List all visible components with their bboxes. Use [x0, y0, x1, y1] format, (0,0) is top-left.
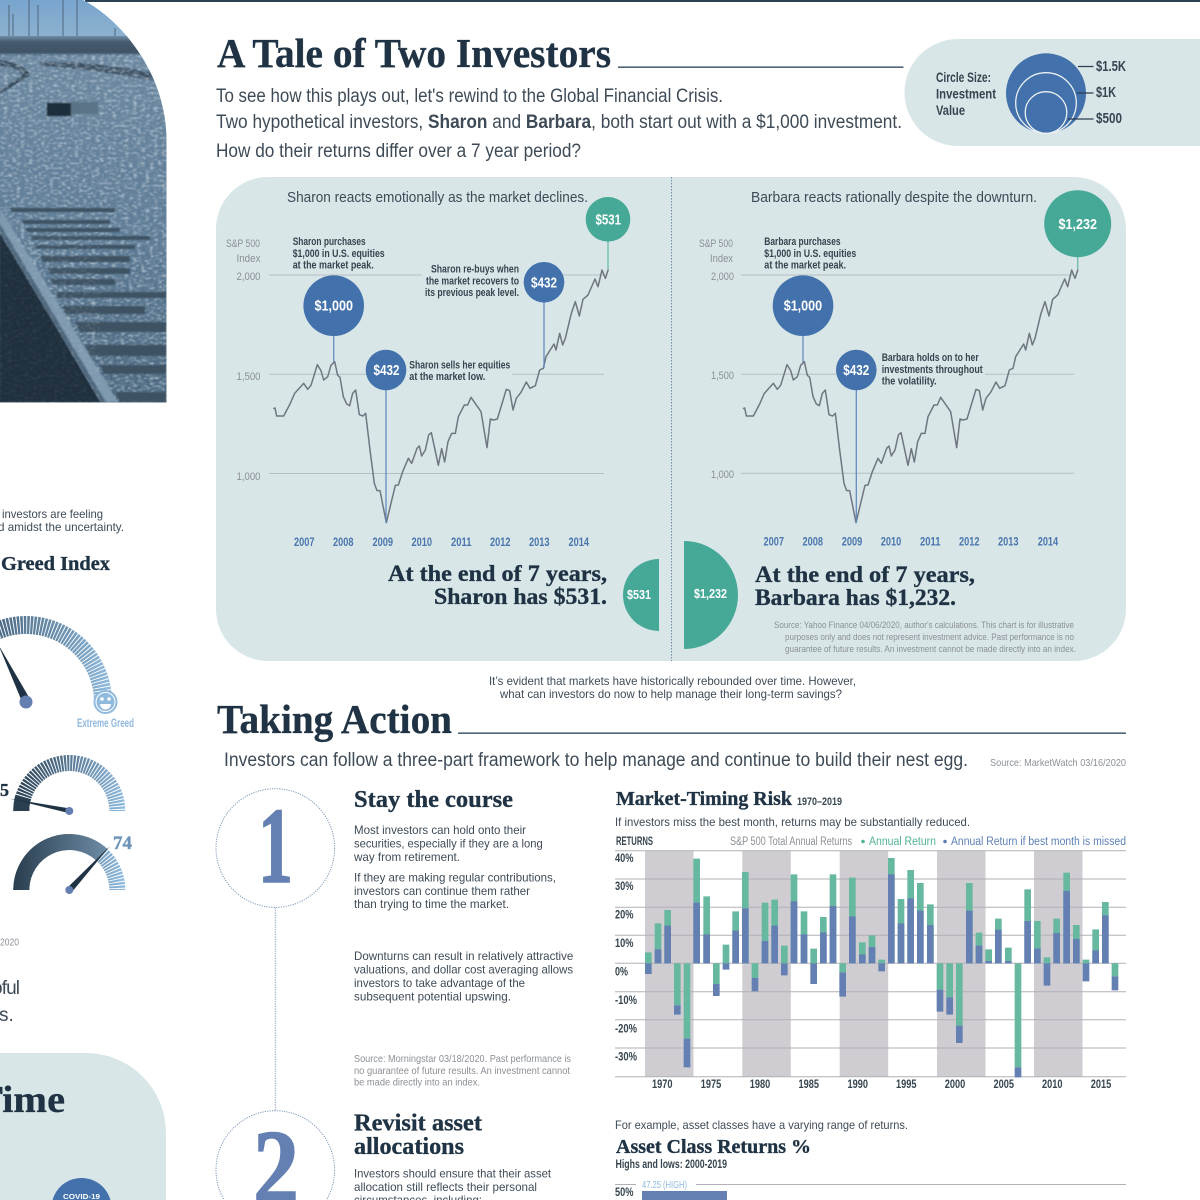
- chart: Barbara: 2014: [1038, 536, 1059, 548]
- chart: Barbara: 1,500: [711, 370, 734, 382]
- photo: railway tracks: [0, 0, 170, 404]
- source: MarketWatch: Source: MarketWatch 03/16/2020: [990, 757, 1126, 769]
- chart: asset class returns: For example, asset classes have a varying range of returns.: [615, 1118, 908, 1132]
- chart: Sharon: at the market low.: [409, 371, 485, 383]
- step 1: stay the course: 1: [258, 787, 293, 906]
- subheading: framework: Investors can follow a three-part framework to help manage and continue to build their nest egg.: [224, 750, 968, 771]
- source note: chart: purposes only and does not represent investment advice. Past performance is no: [785, 632, 1074, 643]
- bar chart: market timing returns: 2005: [994, 1077, 1014, 1091]
- transition text: [490, 676, 856, 700]
- intro text: [216, 86, 902, 162]
- chart: Sharon: Index: [236, 253, 261, 265]
- chart legend: returns: Annual Return: [869, 836, 936, 848]
- bar chart: market timing returns: 1970: [652, 1077, 673, 1091]
- bar chart: market timing returns: 1985: [798, 1077, 819, 1091]
- heading: market-timing risk: [615, 789, 970, 829]
- heading: market-timing risk: 1970–2019: [797, 796, 842, 808]
- chart: Sharon: Sharon purchases: [293, 236, 366, 248]
- source note: chart: guarantee of future results. An investment cannot be made directly into an index.: [785, 644, 1076, 655]
- bar chart: market timing returns: [615, 851, 1126, 1091]
- chart: Barbara: at the market peak.: [764, 260, 846, 272]
- chart: Sharon: 2009: [372, 537, 393, 549]
- chart: Barbara: $1,000 in U.S. equities: [764, 248, 856, 260]
- chart legend: returns: Annual Return if best month is missed: [951, 836, 1126, 848]
- left column text: investor sentiment: investors are feeling: [2, 507, 103, 521]
- chart: Sharon: 2007: [294, 537, 314, 549]
- chart: Barbara: 2008: [802, 536, 823, 548]
- result: Barbara: Barbara has $1,232.: [755, 585, 956, 610]
- step 1: stay the course: no guarantee of future results. An investment cannot: [354, 1065, 570, 1077]
- chart: Barbara: 1,000: [711, 469, 734, 481]
- chart: Sharon: 2014: [568, 537, 589, 549]
- chart: Sharon: $1,000: [314, 298, 353, 314]
- gauge: previous value 5: 5: [0, 780, 9, 800]
- chart: Sharon: its previous peak level.: [425, 287, 519, 299]
- bar chart: market timing returns: 40%: [615, 851, 634, 865]
- step 2: revisit asset allocations: allocations: [354, 1134, 464, 1160]
- step 1: stay the course: [216, 787, 574, 1111]
- heading: Taking Action: Taking Action: [217, 696, 452, 742]
- bar chart: market timing returns: 1990: [848, 1077, 868, 1091]
- legend: circle size: Investment: [936, 86, 996, 102]
- bar chart: market timing returns: 1980: [750, 1077, 771, 1091]
- step 1: stay the course: investors can continue them rather: [354, 884, 530, 898]
- chart: Barbara: 2009: [842, 536, 862, 548]
- chart: Barbara: 2010: [881, 536, 901, 548]
- chart: Sharon: 2,000: [236, 271, 260, 283]
- bar chart: market timing returns: 2010: [1042, 1077, 1063, 1091]
- chart: Barbara: Barbara holds on to her: [882, 352, 979, 364]
- chart: Sharon: S&P 500: [226, 238, 260, 250]
- step 1: stay the course: Downturns can result in relatively attractive: [354, 949, 574, 963]
- panel: time: [0, 1053, 166, 1200]
- step 1: stay the course: Stay the course: [354, 787, 513, 813]
- step 1: stay the course: securities, especially if they are a long: [354, 836, 543, 850]
- chart: Barbara: investments throughout: [882, 364, 983, 376]
- source note: chart: [774, 620, 1076, 655]
- step 1: stay the course: way from retirement.: [353, 850, 460, 864]
- result: Barbara: [684, 541, 975, 649]
- step 1: stay the course: than trying to time the market.: [354, 897, 509, 911]
- chart: asset class returns: 47.25 (HIGH): [642, 1179, 687, 1191]
- chart: Barbara: [699, 190, 1111, 548]
- legend: circle size: $1K: [1096, 85, 1116, 101]
- chart: Barbara: Index: [710, 253, 733, 265]
- transition text: what can investors do now to help manage their long-term savings?: [499, 687, 842, 701]
- legend: circle size: $500: [1096, 111, 1122, 127]
- left column text: investor sentiment: [0, 510, 123, 534]
- result: Sharon: [388, 559, 659, 631]
- heading: market-timing risk: If investors miss the best month, returns may be substantially reduced.: [615, 815, 970, 829]
- heading: market-timing risk: Market-Timing Risk: [616, 789, 792, 810]
- chart: Barbara: Barbara reacts rationally despite the downturn.: [751, 190, 1037, 206]
- chart: Sharon: 2010: [412, 537, 432, 549]
- chart: Sharon: the market recovers to: [426, 276, 519, 288]
- chart: Barbara: 2011: [920, 536, 941, 548]
- chart: Barbara: Barbara purchases: [764, 236, 841, 248]
- chart legend: returns: RETURNS: [616, 836, 653, 848]
- left column text: investor sentiment: d amidst the uncertainty.: [0, 520, 124, 534]
- step 2: revisit asset allocations: Revisit asset: [354, 1111, 482, 1137]
- gauge: fear and greed main: [0, 625, 134, 730]
- step 1: stay the course: be made directly into an index.: [354, 1076, 480, 1088]
- step 1: stay the course: If they are making regular contributions,: [354, 870, 556, 884]
- chart: Sharon: $432: [374, 363, 400, 379]
- chart: Sharon: $432: [531, 276, 557, 292]
- chart: asset class returns: Highs and lows: 2000-2019: [616, 1159, 727, 1171]
- bar chart: market timing returns: 2000: [945, 1077, 966, 1091]
- chart: Sharon: 1,000: [236, 471, 260, 483]
- legend: circle size: $1.5K: [1096, 59, 1126, 75]
- chart: Sharon: Sharon sells her equities: [409, 359, 510, 371]
- chart: Barbara: 2,000: [711, 271, 734, 283]
- step 2: revisit asset allocations: Investors should ensure that their asset: [354, 1166, 552, 1180]
- intro text: To see how this plays out, let's rewind to the Global Financial Crisis.: [216, 86, 723, 107]
- chart: Sharon: 2013: [529, 537, 550, 549]
- result: Barbara: At the end of 7 years,: [755, 562, 975, 587]
- bar chart: market timing returns: 10%: [615, 936, 634, 950]
- chart: Barbara: 2012: [959, 536, 980, 548]
- step 2: revisit asset allocations: allocation still reflects their personal: [354, 1180, 537, 1194]
- result: Sharon: At the end of 7 years,: [388, 561, 607, 586]
- bar chart: market timing returns: 30%: [615, 879, 634, 893]
- chart: asset class returns: [615, 1118, 1126, 1200]
- gauge: previous value 5: [0, 763, 117, 815]
- result: Sharon: Sharon has $531.: [434, 584, 607, 609]
- legend: circle size: Value: [936, 102, 965, 118]
- chart: Sharon: at the market peak.: [293, 260, 374, 272]
- chart: Barbara: $1,000: [784, 298, 822, 314]
- bar chart: market timing returns: 20%: [615, 908, 634, 922]
- gauge: fear and greed main: Extreme Greed: [77, 718, 134, 730]
- intro text: How do their returns differ over a 7 year period?: [216, 141, 581, 162]
- transition text: It’s evident that markets have historically rebounded over time. However,: [489, 674, 856, 688]
- bar chart: market timing returns: 0%: [615, 964, 628, 978]
- chart: Barbara: $432: [843, 363, 869, 379]
- step 1: stay the course: investors to take advantage of the: [354, 976, 525, 990]
- chart: Sharon: 2008: [333, 537, 354, 549]
- left column text fragments: [0, 980, 19, 1021]
- legend: circle size: [904, 39, 1200, 146]
- chart: Sharon: 2012: [490, 537, 510, 549]
- chart: Barbara: 2013: [998, 536, 1018, 548]
- chart legend: returns: [616, 836, 1126, 845]
- step 1: stay the course: subsequent potential upswing.: [354, 990, 511, 1004]
- chart: Barbara: the volatility.: [882, 376, 937, 388]
- chart: Sharon: $1,000 in U.S. equities: [293, 248, 385, 260]
- chart: Barbara: $1,232: [1058, 216, 1097, 233]
- chart legend: returns: S&P 500 Total Annual Returns: [730, 836, 852, 848]
- source note: chart: Source: Yahoo Finance 04/06/2020, author's calculations. This chart is for illustrative: [774, 620, 1074, 631]
- result: Sharon: $531: [627, 588, 651, 602]
- chart: asset class returns: 50%: [615, 1185, 634, 1199]
- chart: asset class returns: Asset Class Returns %: [616, 1137, 811, 1158]
- title: A Tale of Two Investors: [217, 30, 611, 76]
- panel: two investor comparison: [216, 177, 1126, 661]
- source: gauge: 2020: [0, 936, 19, 948]
- chart: Barbara: S&P 500: [699, 238, 733, 250]
- step 2: revisit asset allocations: [216, 1109, 552, 1200]
- bar chart: market timing returns: -10%: [615, 993, 637, 1007]
- chart: Barbara: 2007: [764, 536, 784, 548]
- bar chart: market timing returns: -30%: [615, 1050, 637, 1064]
- gauge: current value 74: 74: [113, 833, 132, 854]
- step 1: stay the course: valuations, and dollar cost averaging allows: [354, 962, 573, 976]
- bar chart: market timing returns: -20%: [615, 1022, 637, 1036]
- bar chart: market timing returns: 2015: [1091, 1077, 1112, 1091]
- chart: Sharon: [226, 190, 630, 549]
- chart: Sharon: Sharon re-buys when: [431, 264, 519, 276]
- bar chart: market timing returns: 1995: [896, 1077, 917, 1091]
- intro text: Two hypothetical investors, Sharon and Barbara, both start out with a $1,000 investment.: [216, 112, 902, 133]
- bar chart: market timing returns: 1975: [701, 1077, 722, 1091]
- result: Barbara: $1,232: [694, 587, 727, 601]
- step 1: stay the course: Most investors can hold onto their: [354, 823, 526, 837]
- heading: greed index: Greed Index: [1, 554, 110, 575]
- gauge: current value 74: [21, 833, 132, 894]
- chart: Sharon: 1,500: [236, 371, 260, 383]
- legend: circle size: Circle Size:: [936, 69, 991, 85]
- chart: Sharon: Sharon reacts emotionally as the market declines.: [287, 190, 588, 206]
- chart: Sharon: $531: [596, 212, 621, 228]
- step 1: stay the course: Source: Morningstar 03/18/2020. Past performance is: [354, 1053, 571, 1065]
- chart: Sharon: 2011: [451, 537, 472, 549]
